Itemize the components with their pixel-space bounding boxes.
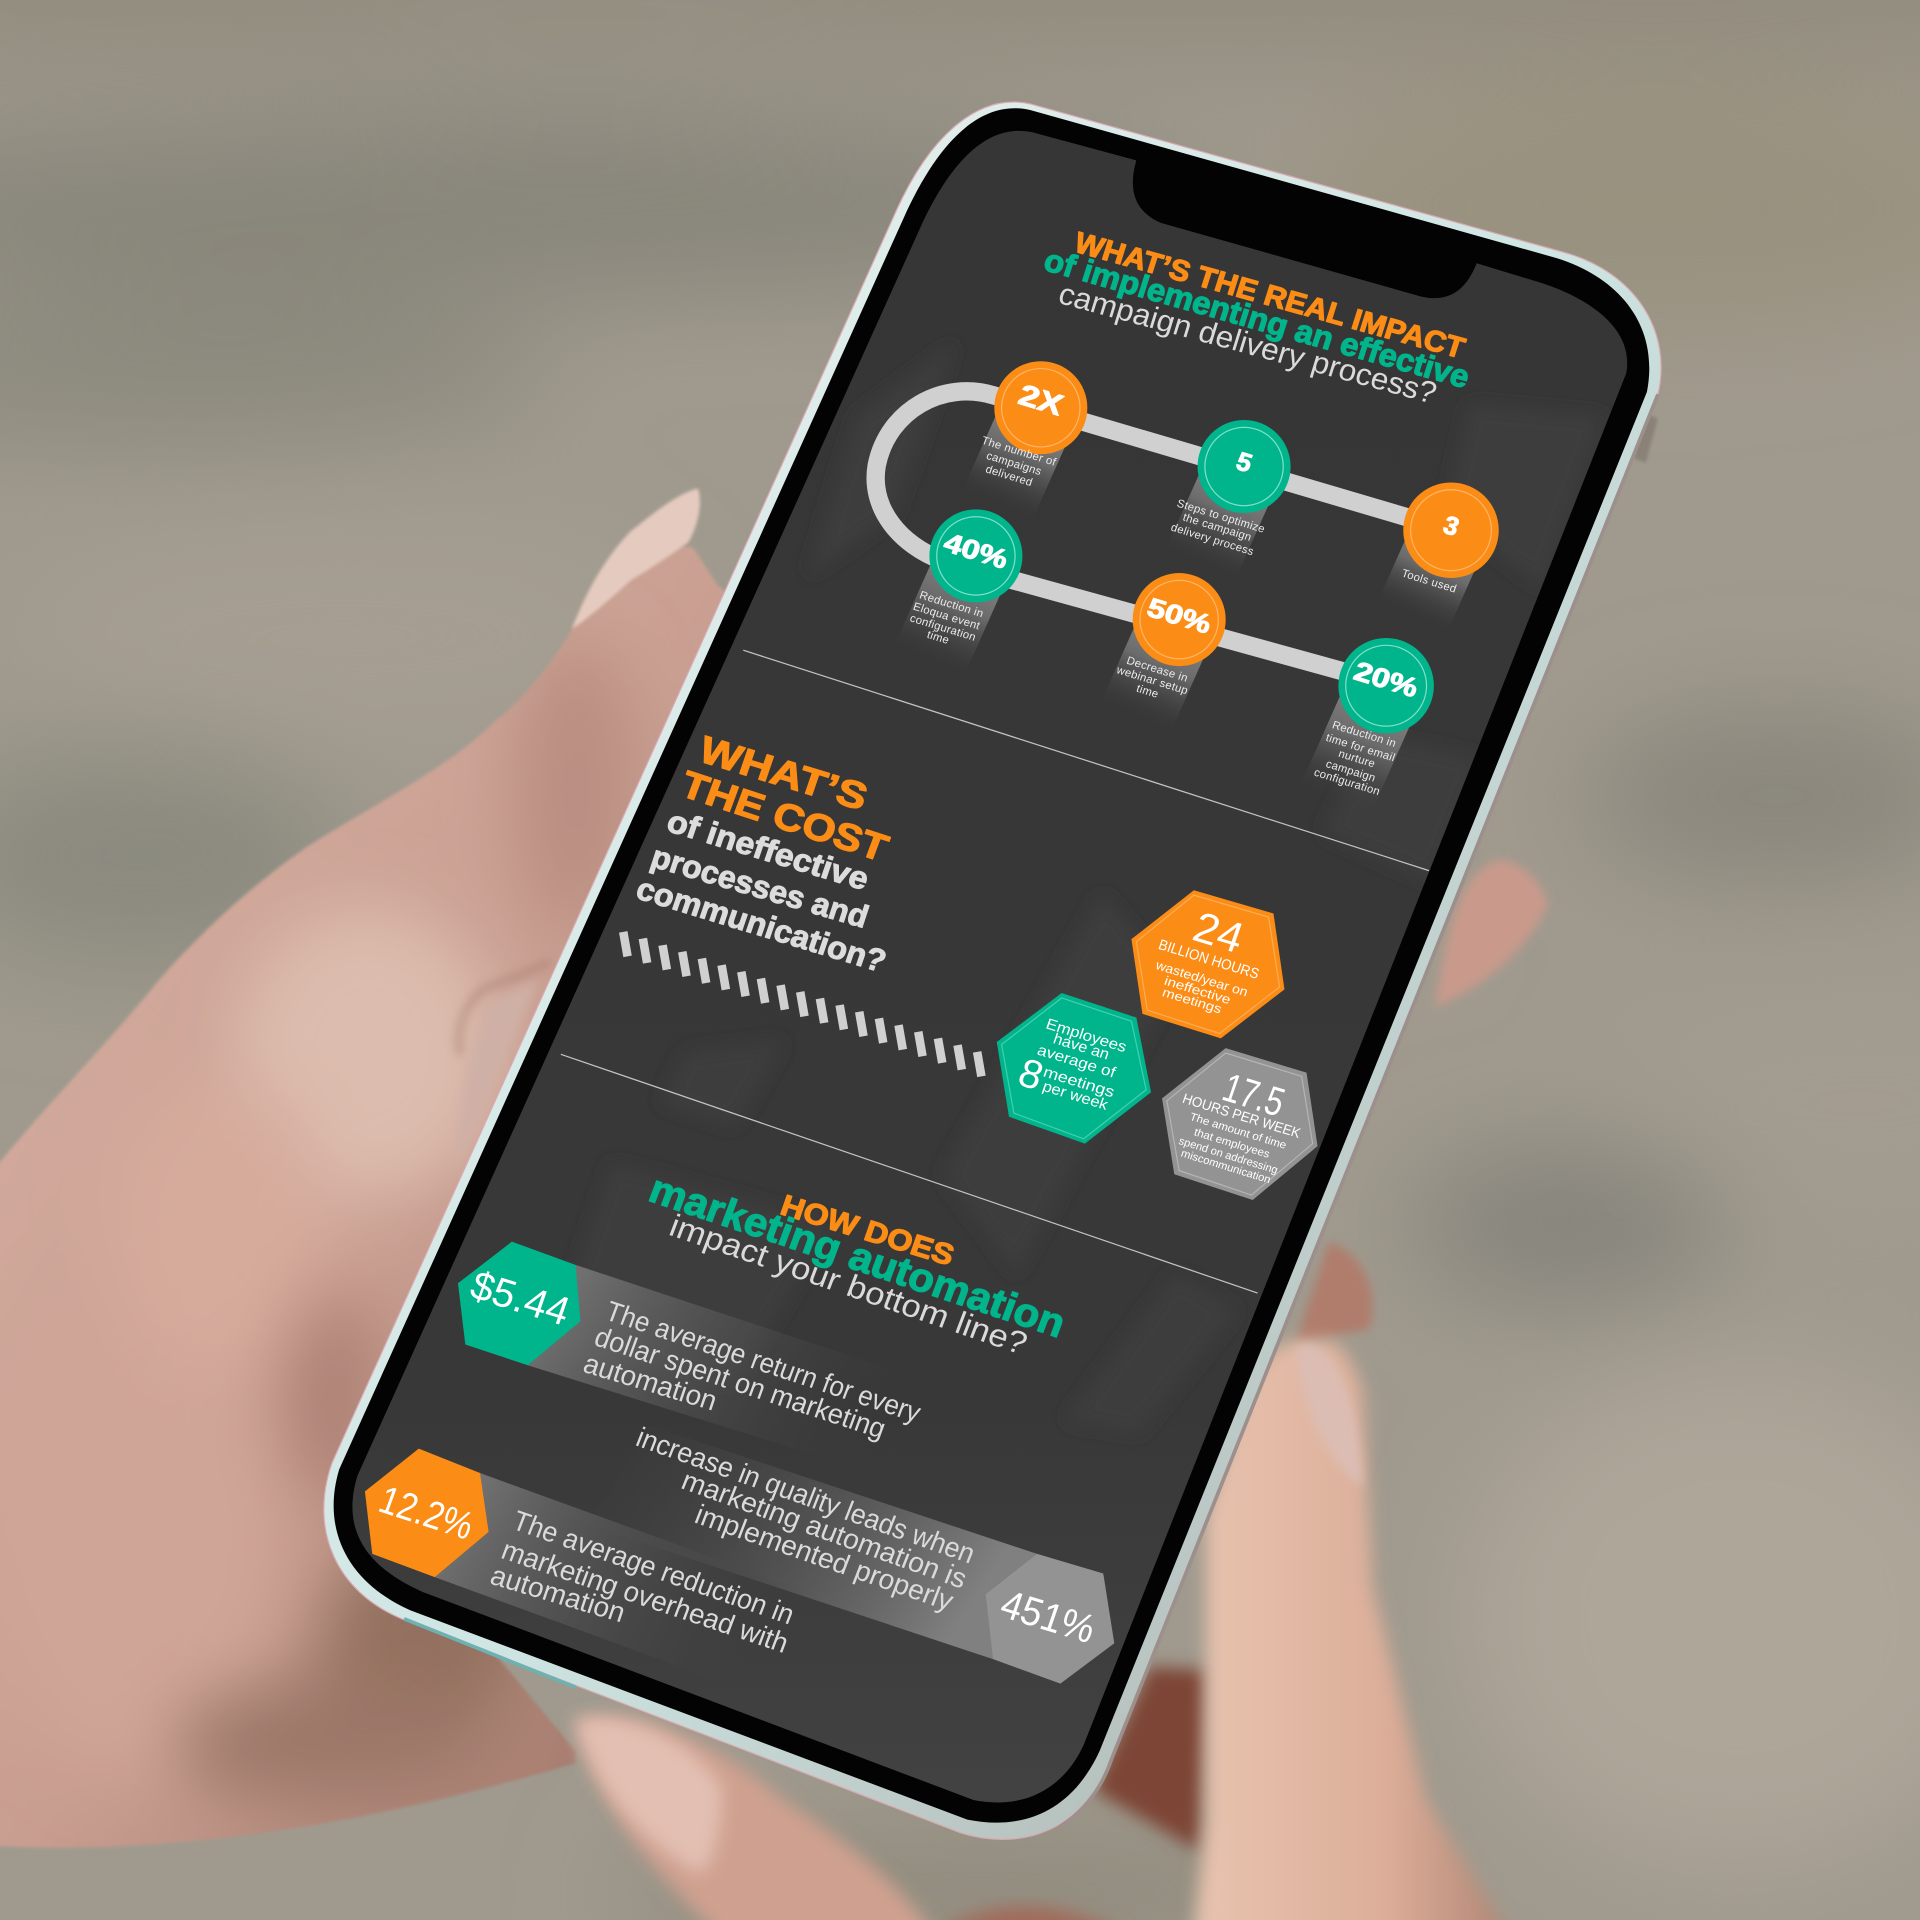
stat: 17.5 hours per week: 17.5 [1217, 1064, 1291, 1125]
stat bar: $5.44: $5.44 [465, 1262, 576, 1334]
heading: how does marketing automation: impact your bottom line? [665, 1207, 1032, 1362]
heading: real impact: WHAT’S THE REAL IMPACT [1071, 226, 1469, 365]
phone body [324, 102, 1661, 1839]
thumb crease [459, 961, 551, 1056]
section: marketing automation [365, 1165, 1114, 1704]
stat: 8 meetings per week: per week [1040, 1078, 1110, 1114]
step: 20% [1299, 638, 1434, 819]
stat bar: 12.2%: The average reduction in [508, 1504, 799, 1630]
stat: 8 meetings per week: average of [1035, 1042, 1119, 1082]
stat: 17.5 hours per week: spend on addressing [1177, 1135, 1279, 1177]
stat bar: 451%: marketing automation is [677, 1464, 972, 1594]
stat bar: $5.44: The average return for every [602, 1294, 926, 1429]
step: 2x: campaigns [985, 450, 1043, 478]
step: 2x: delivered [984, 464, 1034, 489]
step: 5: the campaign [1181, 512, 1253, 544]
step: 20%: time for email [1324, 732, 1397, 764]
stat: 24 billion hours: meetings [1160, 984, 1224, 1016]
stat bar: 12.2%: marketing overhead with [497, 1533, 793, 1659]
side button [1633, 411, 1658, 463]
step: 50%: 50% [1143, 592, 1215, 640]
step: 50%: Decrease in [1125, 655, 1189, 685]
icon: thumb nail [572, 489, 700, 629]
step: 2x: 2X [1014, 378, 1068, 423]
section: campaign delivery impact [876, 226, 1499, 819]
step: 40%: time [925, 629, 951, 647]
hand: palm and thumb [0, 539, 735, 1848]
stat bar: 451% [588, 1421, 1114, 1684]
step: 50% [1101, 573, 1226, 733]
heading: real impact: of implementing an effective [1040, 242, 1474, 395]
stat: 17.5 hours per week: that employees [1192, 1127, 1272, 1161]
step: 40%: Eloqua event [911, 601, 982, 633]
step: 5: Steps to optimize [1175, 498, 1267, 536]
step: 20%: campaign [1324, 758, 1377, 785]
step: 40%: configuration [908, 612, 978, 644]
heading: what's the cost: WHAT’S [694, 729, 873, 819]
stat: 24 billion hours [1131, 890, 1284, 1038]
dashed arrow stripes [623, 932, 981, 1076]
stat: 24 billion hours: ineffective [1162, 973, 1233, 1007]
stat: 17.5 hours per week: HOURS PER WEEK [1180, 1090, 1303, 1141]
stat: 8 meetings per week: meetings [1041, 1064, 1117, 1101]
stat: 8 meetings per week: have an [1051, 1030, 1112, 1063]
step: 5 [1171, 420, 1291, 560]
stat: 17.5 hours per week: miscommunication [1179, 1148, 1272, 1186]
stat bar: $5.44: dollar spent on marketing [591, 1320, 890, 1444]
heading: how does marketing automation: HOW DOES [776, 1189, 958, 1272]
step: 50%: time [1135, 683, 1160, 701]
heading: what's the cost: processes and [647, 838, 873, 935]
step: 3: 3 [1440, 511, 1462, 542]
step: 20%: 20% [1350, 656, 1422, 703]
stat bar: 12.2%: 12.2% [373, 1479, 479, 1548]
step: 3 [1377, 482, 1499, 633]
heading: what's the cost: THE COST [675, 764, 893, 870]
step: 5: 5 [1233, 448, 1255, 478]
step: 40%: Reduction in [918, 590, 985, 620]
hand: fingers right and below [576, 860, 1548, 1920]
section: cost of ineffective processes [623, 729, 1318, 1200]
step: 3: Tools used [1400, 568, 1458, 596]
stat: 17.5 hours per week [1162, 1048, 1318, 1200]
stat bar: 12.2%: automation [487, 1559, 629, 1628]
step: 20%: nurture [1337, 748, 1377, 770]
stat: 8 meetings per week: Employees [1044, 1016, 1129, 1056]
step: 2x [972, 361, 1088, 501]
stat bar: 451%: increase in quality leads when [632, 1421, 980, 1569]
stat: 17.5 hours per week: The amount of time [1188, 1111, 1288, 1152]
heading: what's the cost: of ineffective [663, 803, 874, 897]
step: 5: delivery process [1169, 522, 1255, 558]
phone screen [352, 130, 1628, 1802]
stat bar: $5.44 [458, 1242, 949, 1477]
heading: how does marketing automation: marketing automation [643, 1165, 1072, 1346]
stat bar: 451%: 451% [995, 1581, 1101, 1652]
step: 40% [894, 509, 1022, 678]
step: 50%: webinar setup [1114, 664, 1190, 697]
step: 20%: configuration [1312, 767, 1382, 798]
stat: 24 billion hours: 24 [1187, 903, 1250, 963]
stat: 24 billion hours: BILLION HOURS [1156, 937, 1261, 983]
dividers [561, 650, 1429, 1293]
step: 20%: Reduction in [1330, 719, 1398, 750]
stat bar: 12.2% [365, 1449, 845, 1704]
step: 40%: 40% [940, 527, 1012, 575]
heading: what's the cost: communication? [632, 870, 891, 979]
heading: what's the cost [632, 729, 893, 979]
stat: 8 meetings per week: 8 [1013, 1049, 1049, 1099]
stat bar: $5.44: automation [580, 1347, 721, 1417]
stat: 24 billion hours: wasted/year on [1153, 957, 1250, 999]
stat: 8 meetings per week [997, 993, 1151, 1144]
heading: real impact: campaign delivery process? [1055, 277, 1441, 411]
stat bar: 451%: implemented properly [691, 1498, 959, 1617]
timeline track [876, 391, 1451, 683]
step: 2x: The number of [980, 435, 1058, 469]
